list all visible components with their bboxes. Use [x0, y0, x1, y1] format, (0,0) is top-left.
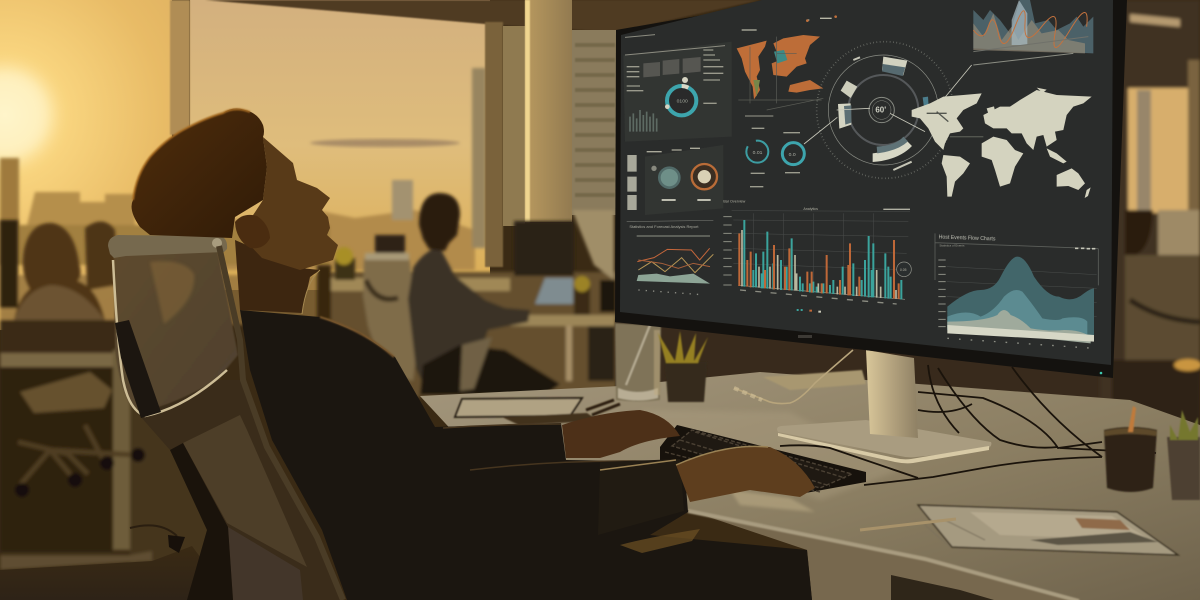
reflection of sunlight on desk edge	[730, 490, 815, 512]
small teal gauges: 0.01	[753, 150, 763, 156]
desk front face	[688, 510, 1079, 600]
mesh highlight patch	[150, 261, 194, 324]
mini bars	[630, 110, 657, 132]
map overlay details	[927, 112, 983, 137]
right background: windows, colleague and chair	[1100, 0, 1200, 440]
thumbnail tiles	[643, 57, 701, 77]
papers	[918, 505, 1178, 555]
teal donut gauge	[667, 86, 696, 115]
pencil	[860, 519, 956, 530]
keyboard	[660, 425, 866, 494]
power plug	[168, 535, 185, 553]
radial HUD chart	[804, 42, 972, 178]
desk light reflection	[640, 410, 900, 500]
desk front edge	[688, 511, 1079, 600]
white cable	[734, 350, 853, 404]
chair lumbar mechanism	[115, 320, 161, 418]
notebook and pens	[455, 398, 620, 425]
chair lit edge	[113, 260, 227, 416]
chart title: Host Events Flow Charts	[939, 235, 996, 243]
ear	[235, 215, 270, 248]
chair rail knob	[212, 238, 222, 248]
backdrop behind monitor and desk	[615, 320, 1130, 410]
potted plant on desk	[658, 331, 708, 402]
upper hand	[562, 410, 680, 458]
desk	[420, 372, 1200, 600]
bar chart: Bar Overview	[723, 200, 746, 204]
sleeve rim	[600, 446, 768, 470]
power led	[1100, 372, 1102, 374]
neck	[235, 240, 320, 313]
chair dark leg	[170, 443, 233, 600]
face	[240, 137, 338, 270]
line chart: Statistics and Forecast Analysis Report	[629, 224, 699, 229]
city skyline	[0, 68, 486, 270]
top-right area chart	[973, 0, 1093, 65]
dashboard contents	[623, 0, 1098, 348]
radial HUD chart: 60'	[875, 106, 886, 115]
monitor frame	[615, 0, 1127, 378]
middle-left circular widgets	[627, 145, 723, 215]
lower hand	[676, 447, 815, 502]
ceiling	[205, 0, 760, 32]
lower sleeve cuff	[598, 459, 684, 535]
chair lower shell	[133, 380, 343, 600]
pen cup	[1104, 406, 1157, 492]
chair frame	[219, 246, 343, 600]
person	[132, 109, 815, 600]
middle background desk, chair and colleague	[317, 193, 620, 397]
hair	[132, 109, 267, 238]
potted plant right	[1167, 410, 1200, 500]
area chart	[935, 233, 1098, 348]
window frames and pillar	[170, 0, 618, 267]
panel: orange regional map	[737, 15, 837, 116]
sweater body	[240, 310, 812, 600]
small teal gauges: 0.0	[789, 152, 796, 158]
bar chart: Analytics	[803, 207, 818, 211]
chair lit upper panel	[183, 415, 307, 567]
monitor stand	[777, 350, 991, 463]
bar chart: 0.05	[900, 268, 907, 272]
shoulder rim light	[320, 317, 394, 357]
cable clips	[734, 388, 762, 400]
panel: top-left KPI panel: 0100	[677, 99, 688, 105]
far desk notepad behind monitor	[763, 370, 866, 390]
chair lit lower panel	[228, 527, 303, 600]
panel: top-left KPI panel	[623, 35, 732, 142]
monitor screen	[620, 0, 1113, 365]
lap highlight	[620, 529, 700, 553]
floor	[0, 546, 232, 600]
world map	[912, 88, 1092, 198]
area chart: Statistics of Events	[939, 244, 965, 248]
monitor logo	[798, 335, 812, 338]
earphone cable	[302, 270, 320, 314]
water glass	[615, 323, 661, 402]
black cables	[780, 365, 1156, 485]
chair mesh back	[114, 247, 238, 410]
sleeve highlights	[443, 424, 676, 470]
line chart	[627, 220, 713, 295]
monitor	[615, 0, 1127, 378]
left desk area and woman	[0, 220, 330, 600]
desk drawer	[891, 575, 994, 600]
chair top rail	[108, 235, 227, 258]
floor cable	[130, 525, 177, 536]
bar chart	[723, 200, 911, 312]
small teal gauges	[746, 128, 804, 187]
hair rim light	[133, 109, 250, 200]
chair	[108, 235, 343, 600]
